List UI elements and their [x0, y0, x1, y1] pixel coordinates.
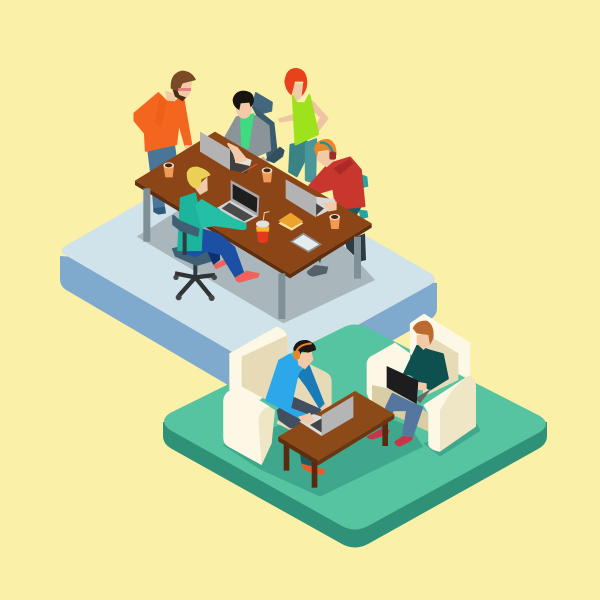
tablet	[290, 233, 322, 253]
cups	[163, 162, 340, 229]
coffee table	[278, 391, 394, 488]
armchair: left front arm	[223, 388, 275, 465]
armchair: left	[229, 327, 332, 430]
right laptop	[286, 179, 337, 217]
person: man in orange	[135, 71, 199, 215]
back laptop	[200, 132, 252, 173]
group: lounge scene	[223, 315, 481, 497]
pencil	[242, 164, 257, 173]
right chair shadow	[423, 423, 481, 457]
red drink cup	[256, 212, 269, 243]
table laptop	[298, 396, 353, 436]
floor shadow	[223, 391, 423, 497]
person: blond man with chair	[172, 167, 260, 301]
person: man in red hoodie, back layers	[307, 139, 368, 277]
group: work table scene	[135, 68, 375, 323]
person: man in blue hoodie	[266, 340, 328, 475]
sandwich	[278, 213, 303, 231]
chair: back chair	[253, 93, 283, 162]
armchair: right	[367, 315, 469, 432]
platform: green lounge area	[163, 324, 547, 548]
front laptop	[214, 180, 259, 224]
person: man in grey jacket	[224, 91, 270, 159]
table top	[135, 132, 372, 278]
table shadow	[137, 157, 375, 323]
platform: blue work area	[60, 156, 437, 407]
armchair: right front arm	[423, 375, 476, 452]
table legs	[143, 188, 361, 319]
person: man in dark green	[367, 321, 448, 447]
person: woman in green	[279, 68, 327, 183]
